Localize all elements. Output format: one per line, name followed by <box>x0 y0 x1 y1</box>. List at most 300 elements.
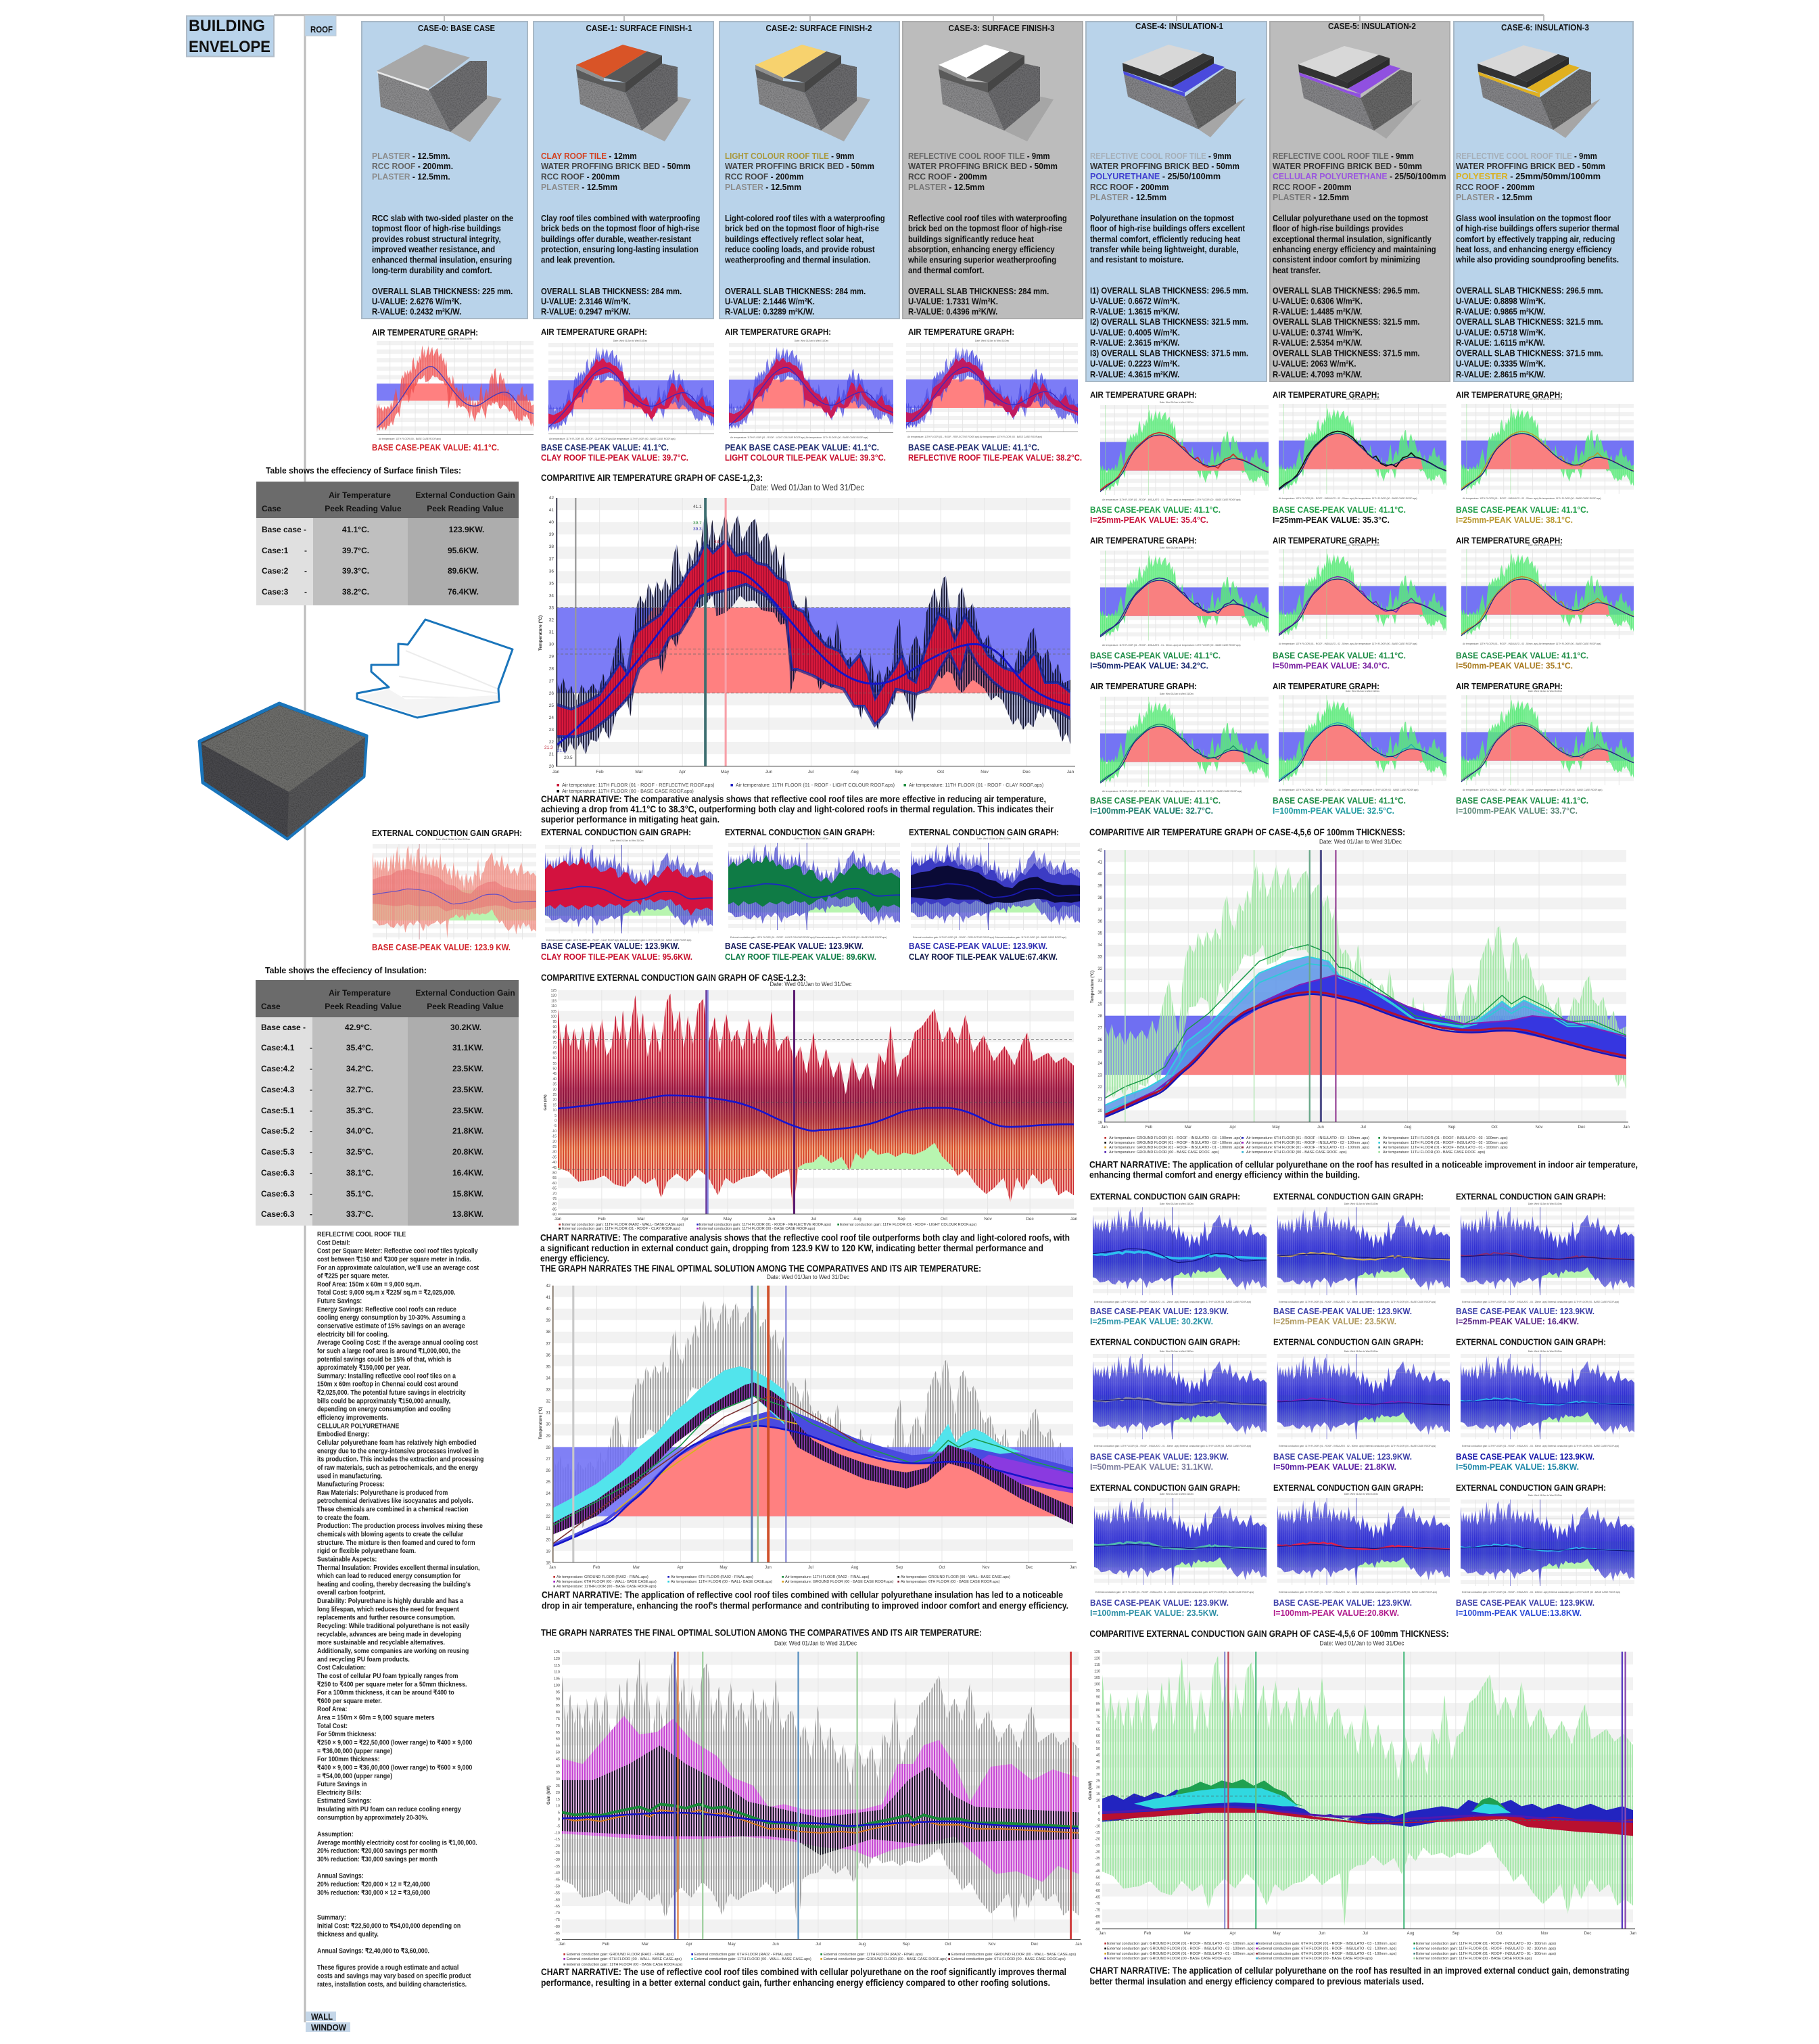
axis: temperature ticks: 34 <box>1097 944 1103 948</box>
chart: insulation 50mm case 5 air: I=50mm-PEAK VALUE: 34.0°C. <box>1273 660 1390 671</box>
panel: case 1 surface finish 1: CASE-1: SURFACE FINISH-1 <box>586 23 692 33</box>
axis: temperature ticks: 33 <box>546 1389 551 1393</box>
text: case 4 specs: Polyurethane insulation on the topmost <box>1090 213 1234 223</box>
axis: gain ticks: -20 <box>1095 1838 1100 1842</box>
legend: ■ <box>1413 1942 1415 1946</box>
icon: polyester roof <box>1478 45 1601 138</box>
table title: insulation: Table shows the effeciency of Insulation: <box>265 965 427 975</box>
legend: ■ <box>696 1227 699 1231</box>
text: case 4 specs: R-VALUE: 4.3615 m²K/W. <box>1090 369 1179 379</box>
title: building envelope: ENVELOPE <box>189 38 270 56</box>
text: case 1 specs: OVERALL SLAB THICKNESS: 284 mm. <box>541 286 682 296</box>
text block: cost and sustainability notes: Average monthly electricity cost for cooling is ₹1,00,000. <box>317 1839 477 1847</box>
text block: cost and sustainability notes: Insulating with PU foam can reduce cooling energy <box>317 1806 461 1813</box>
legend: ■ <box>691 1957 693 1961</box>
chart: insulation 100mm case 4 air: I=100mm-PEAK VALUE: 32.7°C. <box>1090 806 1213 816</box>
peak value labels: 39.7 <box>693 521 702 526</box>
table: surface finish efficiency: Case <box>262 504 281 513</box>
legend: ■ <box>1104 1146 1106 1150</box>
axis: months: Mar <box>1184 1932 1191 1936</box>
chart: case 1 conduction gain: Date: Wed 01/Jan to Wed 31/Dec <box>610 839 644 842</box>
chart: case 1 air temperature: BASE CASE-PEAK VALUE: 41.1°C. <box>541 442 669 452</box>
image: white foam boards <box>357 620 513 718</box>
chart heading: comparative conduction <box>541 972 852 988</box>
table: insulation efficiency: - <box>310 1126 312 1136</box>
table: insulation efficiency: 42.9°C. <box>345 1023 372 1032</box>
text block: cost and sustainability notes: approximately ₹150,000 per year. <box>317 1364 410 1372</box>
axis: gain ticks: 110 <box>554 1671 560 1675</box>
axis: gain ticks: 100 <box>1094 1683 1100 1687</box>
chart: insulation 100mm case 6 conduction: EXTERNAL CONDUCTION GAIN GRAPH: <box>1456 1483 1606 1493</box>
text block: cost and sustainability notes: overall carbon footprint. <box>317 1589 385 1597</box>
chart: case 3 air temperature: BASE CASE-PEAK VALUE: 41.1°C. <box>908 442 1039 452</box>
table: insulation efficiency: 35.3°C. <box>346 1106 373 1115</box>
axis: gain ticks: -30 <box>552 1151 557 1155</box>
axis: gain ticks: -35 <box>552 1155 557 1159</box>
axis: months: Sep <box>895 770 903 774</box>
chart: case 2 air temperature <box>725 327 893 463</box>
text: case 6 specs: POLYESTER - 25mm/50mm/100mm <box>1456 171 1601 181</box>
text: case 0 specs: RCC ROOF - 200mm. <box>372 161 453 171</box>
axis: gain ticks: -75 <box>554 1918 560 1922</box>
text: case 2 specs: OVERALL SLAB THICKNESS: 284 mm. <box>725 286 866 296</box>
text: case 0 specs: U-VALUE: 2.6276 W/m²K. <box>372 296 462 306</box>
text: case 0 specs: RCC slab with two-sided plaster on the <box>372 213 513 223</box>
chart: insulation 50mm case 6 conduction: Date: Wed 01/Jan to Wed 31/Dec <box>1528 1350 1562 1353</box>
text block: cost and sustainability notes: These figures provide a rough estimate and actual <box>317 1964 458 1972</box>
axis: gain ticks: -90 <box>554 1938 560 1943</box>
legend: External conduction gain: 11TH FLOOR (RA02 - FINAL.aps) <box>824 1953 923 1957</box>
chart: insulation 50mm case 4 conduction: Date: Wed 01/Jan to Wed 31/Dec <box>1160 1350 1194 1353</box>
axis: gain ticks: -10 <box>1095 1824 1100 1828</box>
legend: ■ <box>903 782 906 788</box>
axis: months: Jan <box>554 1217 562 1222</box>
text: case 5 specs: floor of high-rise buildings provides <box>1273 223 1404 233</box>
axis: gain ticks: 30 <box>556 1778 560 1782</box>
icon: reflective tile roof <box>939 45 1054 141</box>
legend: ■ <box>782 1575 784 1579</box>
axis: months: Apr <box>1229 1932 1236 1936</box>
legend: External conduction gain: 6TH FLOOR (00 - WALL- BASE CASE.aps) <box>567 1957 682 1961</box>
chart: insulation 25mm case 6 conduction: Date: Wed 01/Jan to Wed 31/Dec <box>1528 1203 1562 1205</box>
axis: gain ticks: 35 <box>556 1771 560 1775</box>
axis: months: Aug <box>851 770 859 774</box>
axis: gain ticks: 50 <box>552 1067 557 1071</box>
chart: insulation 50mm case 5 conduction: I=50mm-PEAK VALUE: 21.8KW. <box>1273 1462 1396 1472</box>
axis: months: Mar <box>1185 1125 1191 1130</box>
chart heading: final optimal air temperature: THE GRAPH NARRATES THE FINAL OPTIMAL SOLUTION AMONG THE COMPARATIVES AND ITS AIR TEMPERATURE: <box>540 1263 981 1274</box>
axis: temperature ticks: 20 <box>1097 1109 1103 1113</box>
text block: cost and sustainability notes: Total Cost: 9,000 sq.m x ₹225/ sq.m = ₹2,025,000. <box>317 1289 456 1297</box>
axis: gain ticks: 5 <box>1098 1805 1100 1809</box>
text: case 0 specs: PLASTER - 12.5mm. <box>372 172 450 182</box>
chart: insulation 25mm case 5 air: Air temperature: 11TH FLOOR (01 - ROOF - INSULATO - 02 - 25mm .aps) Air temperature: 11TH FLOOR (00 - BASE CASE ROOF.aps) <box>1279 497 1417 500</box>
chart: insulation 50mm case 4 conduction: External conduction gain: 11TH FLOOR (01 - ROOF - INSULATO - 01 - 50mm .aps) External conduction gain: 11TH FLOOR (00 - BASE CASE ROOF.aps) <box>1094 1445 1251 1447</box>
legend: External conduction gain: 11TH FLOOR (00 - BASE CASE ROOF.aps) <box>699 1227 816 1231</box>
legend: External conduction gain: GROUND FLOOR (00 - BASE CASE ROOF.aps) <box>1107 1957 1231 1961</box>
axis: months: Jun <box>1319 1932 1325 1936</box>
axis: gain ticks: -10 <box>554 1831 560 1835</box>
text block: cost and sustainability notes: heating and cooling, thereby decreasing the building's <box>317 1581 471 1589</box>
text: case 5 specs <box>1273 151 1446 379</box>
axis: gain ticks: -30 <box>1095 1851 1100 1855</box>
chart: insulation 25mm case 6 air: AIR TEMPERATURE GRAPH: <box>1456 390 1563 400</box>
axis: months: Apr <box>1229 1125 1236 1130</box>
axis: gain ticks: 80 <box>1096 1709 1100 1713</box>
axis: months: Jan <box>559 1943 565 1947</box>
chart heading: comparative air temperature: Date: Wed 01/Jan to Wed 31/Dec <box>751 482 864 492</box>
axis: months: Oct <box>939 1566 945 1570</box>
chart: insulation 50mm case 4 air: BASE CASE-PEAK VALUE: 41.1°C. <box>1090 651 1221 660</box>
chart: case 0 air temperature: AIR TEMPERATURE GRAPH: <box>372 327 478 338</box>
axis: gain ticks: -50 <box>554 1884 560 1888</box>
chart: insulation 25mm case 4 air: I=25mm-PEAK VALUE: 35.4°C. <box>1090 515 1208 525</box>
table: surface finish efficiency: 39.7°C. <box>342 546 369 555</box>
text: case 3 specs: OVERALL SLAB THICKNESS: 284 mm. <box>908 286 1049 296</box>
axis: gain ticks: 90 <box>552 1025 557 1029</box>
text block: cost and sustainability notes: energy due to the energy-intensive processes involved in <box>317 1447 479 1456</box>
axis: temperature ticks: 29 <box>549 655 554 659</box>
legend: External conduction gain: GROUND FLOOR (01 - ROOF - INSULATO - 02 - 100mm .aps) <box>1107 1947 1255 1951</box>
peak value labels: 38.2 <box>714 540 723 544</box>
axis: temperature ticks: 25 <box>549 703 554 708</box>
text block: cost and sustainability notes: bills could be approximately ₹150,000 annually, <box>317 1397 450 1406</box>
text block: cost and sustainability notes: Roof Area: <box>317 1706 347 1713</box>
axis: months: Aug <box>1404 1125 1411 1130</box>
axis: gain ticks: 95 <box>1096 1689 1100 1693</box>
legend: ■ <box>563 1953 565 1957</box>
legend: ■ <box>1256 1957 1258 1961</box>
icon: polyurethane roof <box>1123 45 1246 137</box>
axis: temperature ticks: 24 <box>546 1492 551 1496</box>
panel: case 2 surface finish 2 <box>719 22 899 319</box>
text block: cost and sustainability notes: chemicals with blowing agents to create the cellular <box>317 1531 463 1539</box>
chart narrative: comparative conduction <box>540 1232 1070 1263</box>
axis: gain ticks: 25 <box>1096 1780 1100 1784</box>
text block: cost and sustainability notes: Summary: Installing reflective cool roof tiles on a <box>317 1372 456 1380</box>
axis: gain ticks: 60 <box>552 1056 557 1061</box>
table: surface finish efficiency: Base case - <box>262 525 306 534</box>
title: building envelope <box>187 16 274 57</box>
axis: months: Feb <box>603 1943 610 1947</box>
legend: External conduction gain: GROUND FLOOR (RA02 - FINAL.aps) <box>567 1953 674 1957</box>
axis: gain ticks: 0 <box>554 1119 557 1123</box>
tag: window: WINDOW <box>311 2022 347 2033</box>
tree connector lines <box>274 14 1544 2022</box>
legend: ■ <box>1413 1947 1415 1951</box>
text block: cost and sustainability notes: conservative estimate of 15% savings on an average <box>317 1322 465 1330</box>
legend: External conduction gain: GROUND FLOOR (01 - ROOF - INSULATO - 01 - 100mm .aps) <box>1107 1952 1255 1956</box>
chart narrative: insulation air <box>1089 1159 1638 1180</box>
axis: gain ticks: 125 <box>1094 1650 1100 1654</box>
axis: gain ticks: 55 <box>1096 1740 1100 1744</box>
chart: insulation 100mm case 6 conduction: BASE CASE-PEAK VALUE: 123.9KW. <box>1456 1598 1594 1608</box>
text block: cost and sustainability notes: For an approximate calculation, we'll use an average cost <box>317 1264 479 1272</box>
legend: Air temperature: 11TH FLOOR (01 - ROOF - REFLECTIVE ROOF.aps) <box>562 782 715 788</box>
axis: temperature ticks: 42 <box>549 496 554 501</box>
chart: insulation 100mm case 6 conduction: I=100mm-PEAK VALUE:13.8KW. <box>1456 1608 1582 1618</box>
legend: External conduction gain: 6TH FLOOR (00 - BASE CASE ROOF.aps) <box>1258 1957 1373 1961</box>
legend: Air temperature: 6TH FLOOR (01 - ROOF - INSULATO - 03 - 100mm .aps) <box>1246 1136 1369 1140</box>
table: insulation efficiency: - <box>310 1168 312 1178</box>
text: case 5 specs: R-VALUE: 2.5354 m²K/W. <box>1273 338 1362 348</box>
axis: months: Aug <box>859 1943 866 1947</box>
text: case 2 specs: weatherproofing and thermal insulation. <box>724 255 870 265</box>
chart: insulation 25mm case 5 conduction: I=25mm-PEAK VALUE: 23.5KW. <box>1273 1316 1396 1326</box>
text block: cost and sustainability notes: Cost Detail: <box>317 1239 350 1247</box>
table: surface finish efficiency: 89.6KW. <box>448 566 479 576</box>
axis: temperature ticks: 33 <box>549 605 554 610</box>
text: case 4 specs: U-VALUE: 0.2223 W/m²K. <box>1090 358 1180 369</box>
text: case 4 specs: WATER PROFFING BRICK BED - 50mm <box>1090 161 1239 171</box>
text: case 5 specs: enhancing energy efficiency and maintaining <box>1273 244 1436 254</box>
chart: insulation 50mm case 5 air: AIR TEMPERATURE GRAPH: <box>1273 536 1379 545</box>
chart: insulation 100mm case 5 conduction <box>1273 1483 1450 1618</box>
text: case 6 specs: WATER PROFFING BRICK BED - 50mm <box>1456 161 1605 171</box>
table: insulation efficiency: - <box>310 1209 312 1219</box>
text: case 3 specs: Reflective cool roof tiles with waterproofing <box>908 213 1067 223</box>
axis: gain ticks: -45 <box>1095 1869 1100 1874</box>
legend: ■ <box>820 1957 822 1961</box>
axis: temperature ticks: 32 <box>549 618 554 622</box>
table: insulation efficiency: Case:6.3 <box>261 1168 295 1178</box>
axis: gain ticks: 20 <box>552 1098 557 1102</box>
text: case 2 specs: reduce cooling loads, and provide robust <box>725 244 875 254</box>
axis: temperature ticks: 29 <box>1097 1002 1103 1006</box>
table: insulation efficiency: 34.0°C. <box>346 1126 373 1136</box>
chart narrative: final conduction <box>541 1966 1066 1988</box>
legend: External conduction gain: 11TH FLOOR (01 - ROOF - INSULATO - 02 - 100mm .aps) <box>1416 1947 1556 1951</box>
table: insulation efficiency: 23.5KW. <box>452 1064 483 1073</box>
chart: insulation 50mm case 5 conduction: Date: Wed 01/Jan to Wed 31/Dec <box>1344 1350 1378 1353</box>
legend: ■ <box>553 1575 555 1579</box>
axis: temperature ticks: 38 <box>549 544 554 549</box>
legend: Air temperature: 6TH FLOOR (01 - ROOF - INSULATO - 01 - 100mm .aps) <box>1246 1146 1369 1150</box>
axis: gain ticks: -55 <box>554 1891 560 1895</box>
text: case 6 specs: OVERALL SLAB THICKNESS: 371.5 mm. <box>1456 348 1603 358</box>
axis: months: May <box>719 1566 728 1570</box>
axis: gain ticks: -30 <box>554 1858 560 1862</box>
legend: ■ <box>1413 1952 1415 1956</box>
legend: Air temperature: GROUND FLOOR (01 - ROOF - INSULATO - 03 - 100mm .aps) <box>1109 1136 1242 1140</box>
legend: ■ <box>1378 1151 1380 1155</box>
icon: clay tile roof <box>576 45 691 141</box>
chart narrative: comparative air: superior performance in mitigating heat gain. <box>541 814 719 824</box>
axis: temperature ticks: 40 <box>546 1307 551 1311</box>
axis: months: Jan <box>1099 1932 1106 1936</box>
chart: insulation 100mm case 5 air <box>1273 681 1446 816</box>
chart: insulation 25mm case 5 air: Date: Wed 01/Jan to Wed 31/Dec <box>1346 398 1379 400</box>
legend: Air temperature: 6TH FLOOR (00 - WALL- BASE CASE.aps) <box>557 1580 657 1584</box>
chart heading: final optimal air temperature <box>540 1263 981 1280</box>
text: case 2 specs: Light-colored roof tiles with a waterproofing <box>725 213 885 223</box>
legend: ■ <box>1242 1146 1244 1150</box>
chart: insulation 25mm case 4 air: AIR TEMPERATURE GRAPH: <box>1090 390 1197 400</box>
text: case 4 specs: POLYURETHANE - 25/50/100mm <box>1090 171 1221 181</box>
chart: case 2 conduction gain: EXTERNAL CONDUCTION GAIN GRAPH: <box>725 827 875 837</box>
text block: cost and sustainability notes: Future Savings: <box>317 1297 362 1305</box>
legend: ■ <box>563 1963 565 1967</box>
chart: case 1 conduction gain: CLAY ROOF TILE-PEAK VALUE: 95.6KW. <box>541 952 692 962</box>
axis: gain ticks: -65 <box>554 1905 560 1909</box>
chart: insulation 50mm case 5 conduction: EXTERNAL CONDUCTION GAIN GRAPH: <box>1273 1337 1423 1347</box>
text: case 3 specs: absorption, enhancing energy efficiency <box>908 244 1055 254</box>
text: case 3 specs: WATER PROFFING BRICK BED - 50mm <box>908 161 1058 171</box>
legend: ■ <box>553 1580 555 1584</box>
axis: months: Jun <box>765 770 773 774</box>
chart: insulation 50mm case 6 conduction: External conduction gain: 11TH FLOOR (01 - ROOF - INSULATO - 03 - 50mm .aps) External conduction gain: 11TH FLOOR (00 - BASE CASE ROOF.aps) <box>1462 1445 1619 1447</box>
chart: insulation 25mm case 4 air: Air temperature: 11TH FLOOR (01 - ROOF - INSULATO - 01 - 25mm .aps) Air temperature: 11TH FLOOR (00 - BASE CASE ROOF.aps) <box>1102 498 1241 501</box>
legend: ■ <box>696 1223 699 1227</box>
legend: Air temperature: 11TH FLOOR (01 - ROOF - INSULATO - 03 - 100mm .aps) <box>1383 1136 1508 1140</box>
axis: months: Oct <box>937 770 944 774</box>
axis: temperature ticks: 27 <box>546 1458 551 1462</box>
text: case 4 specs: I3) OVERALL SLAB THICKNESS: 371.5 mm. <box>1090 348 1248 358</box>
text: case 5 specs: CELLULAR POLYURETHANE - 25/50/100mm <box>1273 171 1446 181</box>
chart: insulation 25mm case 6 air <box>1456 390 1634 525</box>
axis: months: Mar <box>642 1943 648 1947</box>
axis: months: Sep <box>903 1943 910 1947</box>
text: case 3 specs: R-VALUE: 0.4396 m²K/W. <box>908 306 997 317</box>
axis: months: Jan <box>1067 770 1074 774</box>
table: insulation efficiency: Case:4.1 <box>261 1043 295 1052</box>
chart: case 1 air temperature: Date: Wed 01/Jan to Wed 31/Dec <box>613 340 647 342</box>
text: case 0 specs: OVERALL SLAB THICKNESS: 225 mm. <box>372 286 513 296</box>
chart: insulation 100mm case 5 air: BASE CASE-PEAK VALUE: 41.1°C. <box>1273 795 1406 806</box>
text block: cost and sustainability notes <box>316 1230 486 1989</box>
axis: months: Feb <box>593 1566 600 1570</box>
legend: ■ <box>1104 1136 1106 1140</box>
legend: Air temperature: 6TH FLOOR (RA02 - FINAL.aps) <box>671 1575 753 1579</box>
axis: temperature ticks: 25 <box>1097 1050 1103 1054</box>
table: insulation efficiency: 34.2°C. <box>346 1064 373 1073</box>
legend: ■ <box>557 788 559 794</box>
legend: ■ <box>1378 1146 1380 1150</box>
text: case 1 specs: Clay roof tiles combined with waterproofing <box>541 213 700 223</box>
axis: temperature ticks: 21 <box>549 752 554 757</box>
chart: case 1 air temperature: AIR TEMPERATURE GRAPH: <box>541 327 647 337</box>
axis: gain ticks: 90 <box>556 1697 560 1701</box>
chart narrative: comparative conduction: energy efficiency. <box>540 1253 609 1263</box>
legend: External conduction gain: 11TH FLOOR (00 - WALL- BASE CASE.aps) <box>694 1957 811 1961</box>
axis: temperature ticks: 36 <box>1097 920 1103 924</box>
table: insulation efficiency: Case:4.3 <box>261 1085 295 1094</box>
chart heading: final optimal air temperature: Date: Wed 01/Jan to Wed 31/Dec <box>767 1274 849 1280</box>
legend: External conduction gain: GROUND FLOOR (01 - ROOF - INSULATO - 03 - 100mm .aps) <box>1107 1942 1255 1946</box>
chart: insulation 100mm case 4 air: Date: Wed 01/Jan to Wed 31/Dec <box>1160 693 1194 695</box>
text block: cost and sustainability notes: For 50mm thickness: <box>317 1731 377 1738</box>
text block: cost and sustainability notes: Manufacturing Process: <box>317 1481 385 1489</box>
panel: case 3 surface finish 3 <box>903 22 1083 319</box>
chart: insulation 25mm case 5 air <box>1273 390 1446 525</box>
peak value labels: 41.1 <box>693 505 702 509</box>
axis: temperature ticks: 31 <box>1097 979 1103 983</box>
axis: months: Nov <box>984 1217 993 1222</box>
axis: temperature ticks: 39 <box>1097 885 1103 889</box>
table title: surface finish: Table shows the effeciency of Surface finish Tiles: <box>266 465 461 475</box>
chart: insulation 25mm case 6 air: Air temperature: 11TH FLOOR (01 - ROOF - INSULATO - 03 - 25mm .aps) Air temperature: 11TH FLOOR (00 - BASE CASE ROOF.aps) <box>1463 497 1601 500</box>
text block: cost and sustainability notes: used in manufacturing. <box>317 1472 382 1480</box>
chart heading: comparative air temperature: COMPARITIVE AIR TEMPERATURE GRAPH OF CASE-1,2,3: <box>541 472 763 483</box>
axis: gain ticks: -50 <box>552 1171 557 1176</box>
text block: cost and sustainability notes: Total Cost: <box>317 1722 348 1730</box>
axis: months: Sep <box>896 1566 903 1570</box>
chart: case 1 air temperature: CLAY ROOF TILE-PEAK VALUE: 39.7°C. <box>541 452 688 463</box>
axis: gain ticks: -45 <box>552 1166 557 1170</box>
axis: gain ticks: 40 <box>1096 1760 1100 1764</box>
axis: gain ticks: 45 <box>552 1072 557 1076</box>
axis: gain ticks: 0 <box>1098 1811 1100 1815</box>
chart: case 2 air temperature: Air temperature: 11TH FLOOR (01 - ROOF - LIGHT COLOUR ROOF.aps) Air temperature: 11TH FLOOR (00 - BASE CASE ROOF.aps) <box>730 436 868 439</box>
text: case 3 specs: RCC ROOF - 200mm <box>908 172 987 182</box>
axis: months: Jan <box>1630 1932 1636 1936</box>
axis: months: Nov <box>1536 1125 1542 1130</box>
table: insulation efficiency: Case:5.2 <box>261 1126 295 1136</box>
legend: ■ <box>1242 1151 1244 1155</box>
chart: insulation 100mm case 4 air: Air temperature: 11TH FLOOR (01 - ROOF - INSULATO - 01 - 100mm .aps) Air temperature: 11TH FLOOR (00 - BASE CASE ROOF.aps) <box>1102 790 1242 793</box>
legend: External conduction gain: GROUND FLOOR (00 - WALL- BASE CASE.aps) <box>951 1953 1076 1957</box>
text block: cost and sustainability notes: thickness and quality. <box>317 1930 379 1938</box>
text: case 0 specs: topmost floor of high-rise buildings <box>372 223 501 233</box>
chart heading: insulation conduction comparison: COMPARITIVE EXTERNAL CONDUCTION GAIN GRAPH OF CASE-4,5,6 OF 100mm THICKNESS: <box>1090 1628 1448 1639</box>
axis: months: Dec <box>1026 1566 1033 1570</box>
text: case 1 specs: protection, ensuring long-lasting insulation <box>541 244 699 254</box>
axis: gain ticks: 70 <box>556 1724 560 1728</box>
chart: insulation 25mm case 6 conduction: EXTERNAL CONDUCTION GAIN GRAPH: <box>1456 1192 1606 1201</box>
axis: gain ticks: 110 <box>551 1004 557 1008</box>
axis: months: Mar <box>633 1566 640 1570</box>
axis: gain ticks: 120 <box>1094 1657 1100 1661</box>
chart: insulation 100mm case 6 air: AIR TEMPERATURE GRAPH: <box>1456 681 1563 691</box>
axis: gain ticks: -60 <box>1095 1889 1100 1893</box>
legend <box>1104 1136 1508 1155</box>
chart: insulation 50mm case 4 air: Date: Wed 01/Jan to Wed 31/Dec <box>1160 547 1194 549</box>
chart: case 2 air temperature: Date: Wed 01/Jan to Wed 31/Dec <box>795 340 828 342</box>
chart: insulation 25mm case 4 conduction: EXTERNAL CONDUCTION GAIN GRAPH: <box>1090 1192 1240 1201</box>
legend: Air temperature: GROUND FLOOR (00 - BASE CASE ROOF.aps) <box>785 1580 894 1584</box>
axis: gain ticks: 25 <box>556 1784 560 1788</box>
axis: gain ticks: -40 <box>1095 1863 1100 1867</box>
chart: insulation 100mm case 6 air <box>1456 681 1634 816</box>
table: insulation efficiency: - <box>310 1147 312 1157</box>
chart narrative: comparative air: achieving a drop from 41.1°C to 38.3°C, outperforming both clay and light-colored roofs in thermal regulation. This indicates their <box>541 804 1054 814</box>
chart: insulation 100mm case 6 air: I=100mm-PEAK VALUE: 33.7°C. <box>1456 806 1578 816</box>
axis: months: Jul <box>1363 1932 1368 1936</box>
axis: months: Dec <box>1022 770 1031 774</box>
table: surface finish efficiency: Peek Reading Value <box>325 504 402 513</box>
text block: cost and sustainability notes: Estimated Savings: <box>317 1797 372 1805</box>
axis: months: Aug <box>851 1566 858 1570</box>
axis: temperature ticks: 38 <box>546 1330 551 1334</box>
text: case 6 specs: OVERALL SLAB THICKNESS: 296.5 mm. <box>1456 285 1603 296</box>
chart: insulation 25mm case 6 conduction: I=25mm-PEAK VALUE: 16.4KW. <box>1456 1316 1579 1326</box>
text: case 6 specs: while also providing soundproofing benefits. <box>1455 254 1619 264</box>
text: case 4 specs: transfer while being lightweight, durable, <box>1090 244 1239 254</box>
chart: case 3 air temperature: AIR TEMPERATURE GRAPH: <box>908 327 1014 337</box>
axis: temperature ticks: 29 <box>546 1435 551 1439</box>
text block: cost and sustainability notes: For 100mm thickness: <box>317 1756 380 1763</box>
axis: temperature ticks: 42 <box>1097 849 1103 853</box>
axis: temperature ticks: 20 <box>546 1538 551 1542</box>
text block: cost and sustainability notes: petrochemical derivatives like isocyanates and polyols. <box>317 1497 473 1505</box>
axis: gain ticks: -75 <box>552 1197 557 1201</box>
chart: comparative air temperature case 1,2,3 <box>538 496 1075 815</box>
chart: case 3 conduction gain: BASE CASE-PEAK VALUE: 123.9KW. <box>909 941 1047 951</box>
table: surface finish efficiency: 76.4KW. <box>448 587 479 597</box>
axis: gain ticks: 45 <box>1096 1754 1100 1758</box>
chart heading: comparative conduction: Date: Wed 01/Jan to Wed 31/Dec <box>770 981 852 988</box>
icon: light colour tile roof <box>755 45 870 141</box>
